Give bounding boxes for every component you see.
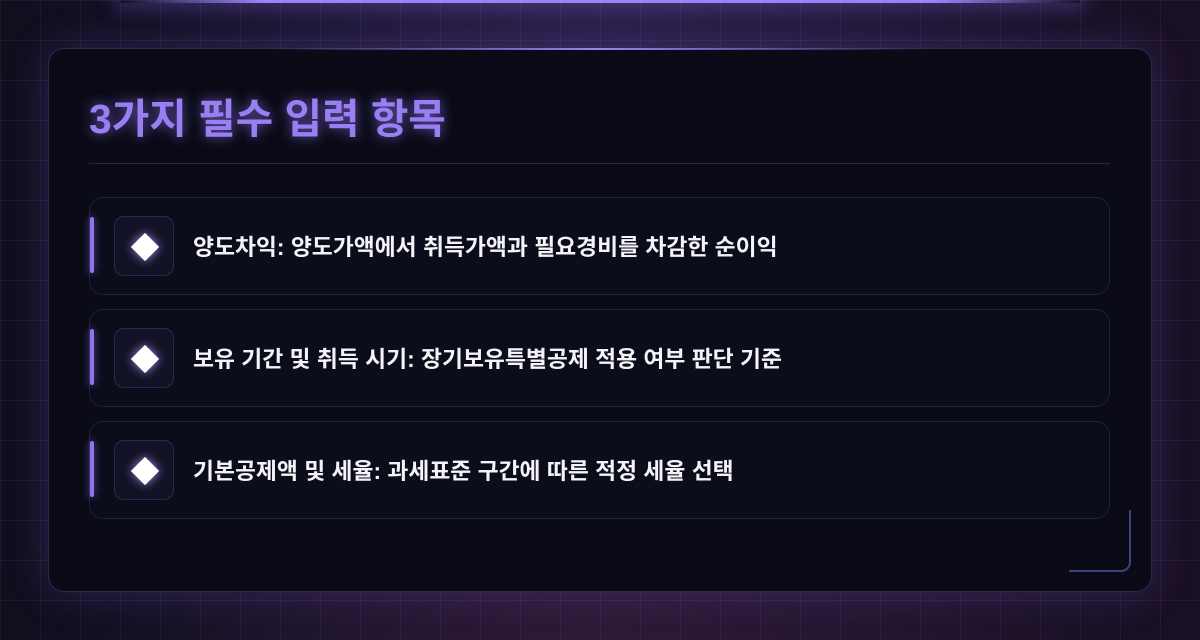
icon: diamond <box>114 216 174 276</box>
text: item 3: 기본공제액 및 세율: 과세표준 구간에 따른 적정 세율 선택 <box>193 458 734 484</box>
item 1 <box>89 197 1110 295</box>
icon: diamond <box>114 328 174 388</box>
text: item 2: 보유 기간 및 취득 시기: 장기보유특별공제 적용 여부 판단 기준 <box>193 346 782 372</box>
title: 3가지 필수 입력 항목 <box>89 96 446 142</box>
panel: main card <box>48 48 1152 592</box>
text: item 1: 양도차익: 양도가액에서 취득가액과 필요경비를 차감한 순이익 <box>193 234 778 260</box>
item 3 <box>89 421 1110 519</box>
corner bracket decoration <box>1069 510 1131 572</box>
item 2 <box>89 309 1110 407</box>
icon: diamond <box>114 440 174 500</box>
